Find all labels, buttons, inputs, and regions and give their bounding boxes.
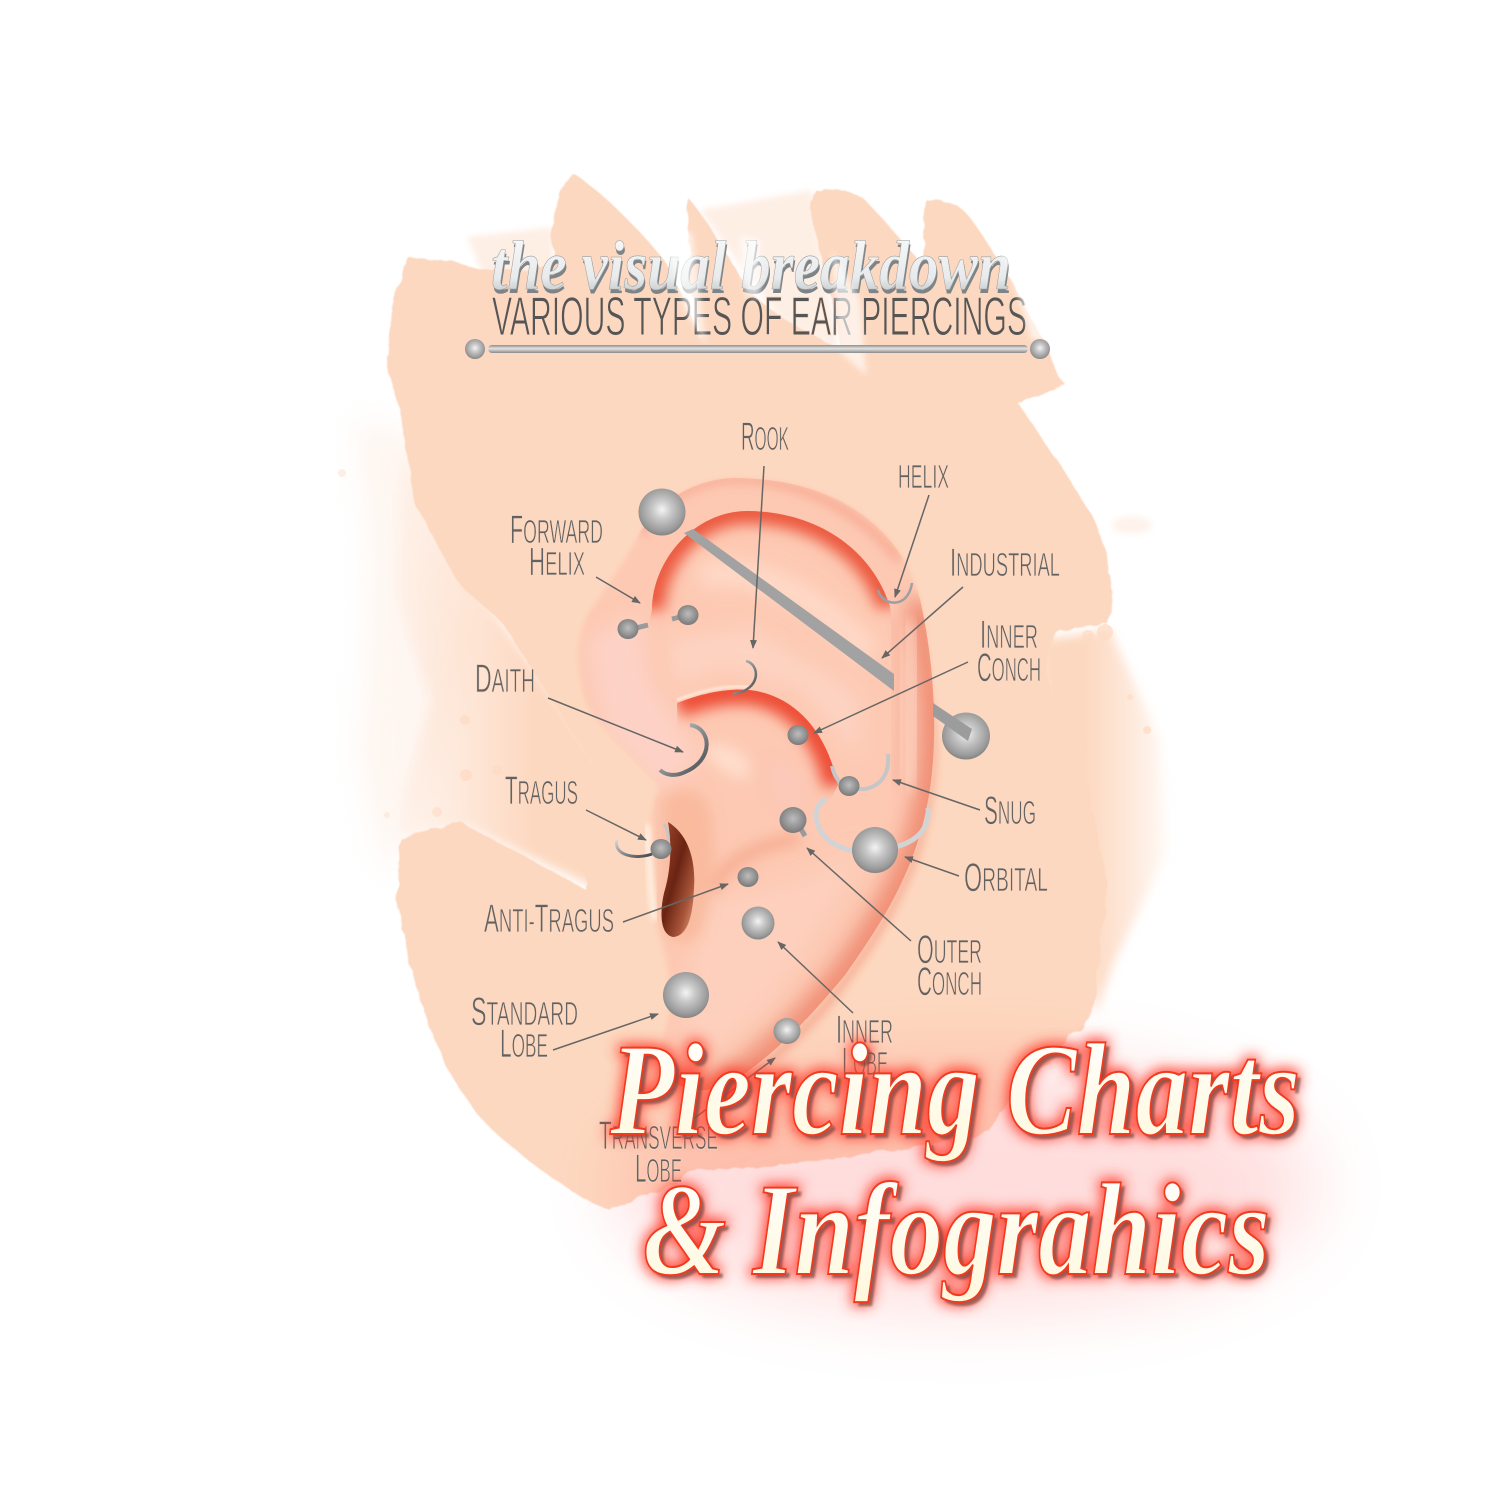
label: industrial: INDUSTRIAL <box>950 541 1060 585</box>
script heading: the visual breakdown <box>492 232 1012 309</box>
main peach paint shape <box>388 173 1113 1210</box>
antihelix highlights <box>665 573 915 790</box>
infographic canvas <box>338 174 1328 1334</box>
title glow: & Infograhics <box>643 1156 1270 1303</box>
daith ring <box>660 725 707 775</box>
lower concha shadow <box>712 838 800 890</box>
subtitle: VARIOUS TYPES OF EAR PIERCINGS <box>492 285 1027 347</box>
title line one: Piercing Charts <box>609 1016 1300 1163</box>
label: inner conch: INNER <box>980 613 1038 657</box>
ear outer shape <box>578 478 934 1090</box>
title drop shadow: Piercing Charts <box>613 1020 1304 1167</box>
barbell divider <box>465 339 1050 359</box>
label: outer conch: CONCH <box>917 960 982 1004</box>
overlay title: Piercing Charts & Infograhics <box>609 1016 1304 1307</box>
watercolor background wash <box>338 173 1168 1210</box>
label: transverse lobe: TRANSVERSE <box>599 1114 718 1158</box>
label: forward helix <box>510 508 603 584</box>
inner conch stud <box>788 725 808 745</box>
transverse lobe stud <box>774 1018 800 1044</box>
anti-tragus stud <box>738 867 758 887</box>
label: orbital: ORBITAL <box>964 856 1048 900</box>
label: snug: SNUG <box>984 789 1036 833</box>
label: transverse lobe <box>599 1114 718 1191</box>
label: daith: DAITH <box>475 657 535 701</box>
script heading: the visual breakdown <box>491 228 1011 305</box>
header text block <box>465 228 1052 375</box>
label: outer conch <box>917 928 982 1004</box>
rook ring <box>733 661 756 694</box>
label: inner lobe: INNER <box>836 1008 893 1052</box>
orbital ring <box>816 799 928 873</box>
helix ring <box>878 583 912 603</box>
concha upper crease highlight <box>677 687 750 700</box>
title glow: Piercing Charts <box>609 1016 1300 1163</box>
tragus and canal surround <box>662 790 714 942</box>
forward helix stud <box>618 605 698 639</box>
industrial barbell <box>638 488 990 760</box>
label: forward helix: FORWARD <box>510 508 603 552</box>
title haze glow <box>615 1060 1315 1310</box>
label: outer conch: OUTER <box>917 928 982 972</box>
outside edge cast shadow <box>720 700 931 1092</box>
ear edge shading <box>585 478 934 1090</box>
snug ring <box>832 754 888 796</box>
label: standard lobe: STANDARD <box>471 990 578 1034</box>
label: inner lobe <box>836 1008 893 1084</box>
ear canal <box>661 822 694 937</box>
pale brush strokes at top <box>467 190 839 350</box>
title glow <box>609 1016 1300 1303</box>
label: inner conch <box>977 613 1041 690</box>
concha red arch <box>677 690 838 796</box>
label: transverse lobe: LOBE <box>635 1147 682 1191</box>
title drop shadow <box>613 1020 1304 1307</box>
soft right splatter wash <box>1040 516 1168 1015</box>
label: rook: ROOK <box>741 415 789 459</box>
label: standard lobe: LOBE <box>500 1022 548 1066</box>
soft left splatter wash <box>338 420 600 890</box>
label: tragus: TRAGUS <box>505 769 578 813</box>
inner lobe stud <box>742 906 774 940</box>
inner fold red rim <box>652 511 890 610</box>
standard lobe stud <box>663 972 709 1018</box>
ear illustration <box>578 478 934 1092</box>
label: anti-tragus: ANTI-TRAGUS <box>484 897 614 941</box>
title drop shadow: & Infograhics <box>647 1160 1274 1307</box>
title line two: & Infograhics <box>643 1156 1270 1303</box>
callout arrows <box>548 466 980 1120</box>
paint gaps fading the heading <box>664 232 1052 375</box>
tragus ring <box>617 824 672 859</box>
label: inner conch: CONCH <box>977 646 1041 690</box>
jewelry <box>617 488 990 1044</box>
label: helix: HELIX <box>898 458 949 495</box>
label: forward helix: HELIX <box>529 540 585 584</box>
tragus highlight <box>647 825 655 920</box>
label: standard lobe <box>471 990 578 1066</box>
label: inner lobe: LOBE <box>842 1040 888 1084</box>
outer conch stud <box>780 807 806 836</box>
